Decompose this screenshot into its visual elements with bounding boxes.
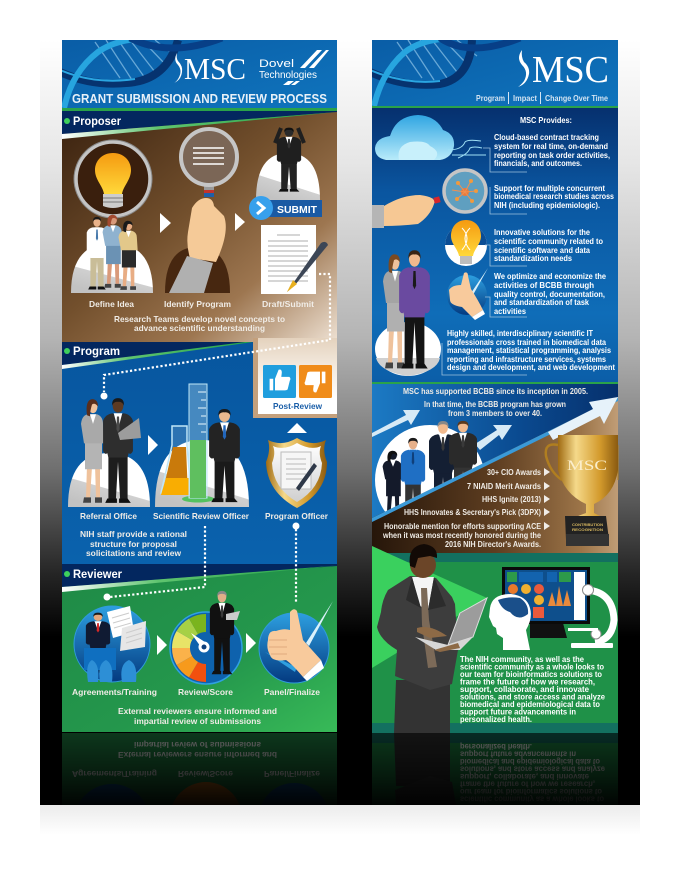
text: proposer caption [114,314,285,333]
panel: post-review [253,338,337,418]
reflection: right banner: support, collaborate, and innovate [460,772,589,782]
arrow [235,213,245,231]
icon: thumbs down [299,365,332,398]
text: biomedical support: NIH (including epidemiologic). [494,200,600,210]
reflection: left banner: impartial review of submissions [134,740,261,750]
text: optimize activities: We optimize and economize the [494,271,606,281]
panel: MSC provides (right banner) [370,38,618,382]
tagline: Impact [513,93,537,103]
heading: MSC provides: MSC Provides: [520,115,572,125]
label: define idea: Define Idea [89,299,134,309]
icon: submit figure [256,128,320,200]
text: BCBB growth: MSC has supported BCBB since its inception in 2005. [403,386,588,396]
text: cloud tracking: reporting on task order activities, [494,150,610,160]
text: highly skilled professionals [447,328,615,372]
icon: team on dome [375,420,512,512]
decorative triangle backdrop [372,546,487,668]
icon: trophy: CONTRIBUTION [572,523,604,527]
arrow [148,435,158,455]
icon: trophy [546,435,618,546]
list: awards [382,467,550,549]
icon: thumbs up circle [447,268,488,320]
icon: document and pen [261,225,328,294]
text: NIH community: personalized health. [460,714,532,724]
icon: head with brain [489,594,531,650]
list: awards: 2016 NIH Director's Awards. [445,539,541,549]
label: panel/finalize: Panel/Finalize [264,687,320,697]
floor strip below the backdrop [40,805,640,835]
arrow [160,213,171,233]
reflection: right banner: solutions, and store access and analyze [460,764,605,774]
icon: thumbs up [263,365,296,398]
arrow [157,635,167,655]
list: awards: HHS Ignite (2013) [482,494,541,504]
text: NIH community: scientific community as a whole looks to [460,662,604,672]
text: cloud tracking [494,132,610,168]
header: right banner [370,38,618,108]
reflection: right banner: support future advancements in [460,750,576,760]
text: program caption [80,529,187,558]
list: awards: HHS Innovates & Secretary's Pick (3DPX) [404,507,541,517]
label: referral office: Referral Office [80,511,137,521]
dotted connector: proposer to referral office [104,274,330,603]
reflection: left banner [62,733,337,804]
icon: team on dome [71,215,153,293]
text: program caption: NIH staff provide a rational [80,529,187,539]
text: NIH community: The NIH community, as well as the [460,654,584,664]
icon: trophy: MSC [567,458,607,474]
text: biomedical support [494,183,614,210]
logo: MSC: MSC [184,51,246,86]
panel: program [62,338,337,566]
text: optimize activities [494,271,606,316]
text: cloud tracking: financials, and outcomes. [494,158,582,168]
list: awards: Honorable mention for efforts supporting ACE [384,521,541,531]
reflection: right banner [372,733,618,802]
text: innovative solutions [494,227,603,263]
reflection: right banner: scientific community as a whole looks to [460,794,604,804]
arrow: large growth [548,397,618,440]
label: agreements/training: Agreements/Training [72,687,157,697]
text: reviewer caption [118,706,277,726]
chart: review score gauge [170,591,242,684]
text: NIH community: solutions, and store access and analyze [460,692,605,702]
logo: Dovel Technologies [259,50,329,85]
list: awards: when it was most recently honored during the [382,530,541,540]
panel: grant submission and review process (left banner) [60,38,337,732]
logo: MSC large: MSC [532,49,609,91]
text: highly skilled professionals: management, statistical programming, analysis [447,345,611,355]
icon: light bulb with DNA [445,220,487,266]
icon: agreements training circle [74,606,150,682]
text: program caption: solicitations and review [86,548,181,558]
section band: program [62,342,253,369]
text: optimize activities: quality control, documentation, [494,289,605,299]
panel: reviewer [62,564,337,732]
reflection: left banner: Agreements/Training [72,769,157,779]
text: reviewer caption: External reviewers ensure informed and [118,706,277,716]
icon: couple on dome [375,250,441,376]
icon: trophy: RECOGNITION [572,528,604,532]
text: BCBB growth: from 3 members to over 40. [448,408,542,418]
icon: monitor dashboard [502,567,590,638]
title: GRANT SUBMISSION AND REVIEW PROCESS [72,92,327,106]
reflection: right banner: personalized health. [460,742,532,752]
panel: NIH community [372,544,618,733]
label: review/score: Review/Score [178,687,233,697]
icon: DNA helix left [60,38,222,108]
text: BCBB growth: In that time, the BCBB program has grown [424,399,566,409]
icon: lab glassware and officer [155,384,249,507]
background: grey to black backdrop [40,40,640,805]
text: highly skilled professionals: Highly skilled, interdisciplinary scientific IT [447,328,594,338]
section band: proposer: Proposer [73,116,121,128]
text: NIH community: support, collaborate, and innovate [460,684,589,694]
reflection: left banner: Review/Score [178,769,233,779]
text: NIH community [460,654,605,724]
button: submit [249,196,322,220]
text: highly skilled professionals: design and development, and web development [447,362,615,372]
list: awards: 30+ CIO Awards [487,467,541,477]
text: highly skilled professionals: reporting and infrastructure services, systems [447,354,606,364]
text: NIH community: frame the future of how we research, [460,676,595,686]
text: innovative solutions: scientific community related to [494,236,603,246]
text: proposer caption: Research Teams develop novel concepts to [114,314,285,324]
icon: referral office people [68,398,150,507]
tagline [476,92,608,104]
text: optimize activities: activities [494,306,526,316]
text: innovative solutions: standardization needs [494,253,572,263]
arrow [287,423,307,433]
section band: reviewer: Reviewer [73,569,122,581]
text: proposer caption: advance scientific understanding [134,323,265,333]
dotted connector end points [100,392,300,600]
reflection: right banner: our team for bioinformatics solutions to [460,787,602,797]
icon: shield with document [266,438,327,508]
icon: DNA helix right [370,38,520,106]
logo: Dovel Technologies: Dovel [259,58,294,70]
text: NIH community: support future advancements in [460,706,576,716]
panel: proposer [62,111,337,343]
label: scientific review officer: Scientific Review Officer [153,511,250,521]
reflection: right banner: frame the future of how we research, [460,780,595,790]
arrow: small growth [372,410,420,437]
label: post-review: Post-Review [273,401,322,411]
panel: BCBB growth and awards [372,382,618,553]
tagline: Change Over Time [545,93,608,103]
label: program officer: Program Officer [265,511,329,521]
text: NIH community: biomedical and epidemiological data to [460,699,600,709]
button: submit: SUBMIT [277,204,318,216]
section band: program: Program [73,346,120,358]
label: draft/submit: Draft/Submit [262,299,314,309]
icon: hand with magnifier [165,129,237,293]
text: optimize activities: and standardization of task [494,297,589,307]
reflection: right banner: biomedical and epidemiological data to [460,757,600,767]
icon: hand with magnifier [372,170,486,228]
text: innovative solutions: Innovative solutions for the [494,227,590,237]
icon: microscope [568,572,614,648]
text: NIH community: our team for bioinformatics solutions to [460,669,602,679]
text: cloud tracking: Cloud-based contract tracking [494,132,599,142]
icon: light bulb in ring [74,140,152,218]
logo: Dovel Technologies: Technologies [259,69,317,81]
label: identify program: Identify Program [164,299,231,309]
header: left banner [60,38,337,111]
text: biomedical support: Support for multiple concurrent [494,183,605,193]
list: awards: 7 NIAID Merit Awards [467,481,541,491]
reflection: left banner: External reviewers ensure informed and [118,750,277,760]
text: innovative solutions: scientific software and data [494,245,590,255]
reflection: left banner: Panel/Finalize [264,769,320,779]
text: program caption: structure for proposal [90,539,177,549]
icon: thumbs up panel circle [259,601,333,683]
section band: reviewer [62,564,337,592]
icon: man with laptop [377,544,487,733]
arrow [246,633,256,653]
text: highly skilled professionals: professionals cross trained in biomedical data [447,337,606,347]
text: optimize activities: activities of BCBB through [494,280,594,290]
icon: cloud [375,115,486,160]
text: BCBB growth [403,386,588,418]
text: reviewer caption: impartial review of submissions [134,716,261,726]
tagline: Program [476,93,505,103]
text: biomedical support: biomedical research studies across [494,191,614,201]
section band: proposer [62,111,337,139]
text: cloud tracking: system for real time, on-demand [494,141,608,151]
